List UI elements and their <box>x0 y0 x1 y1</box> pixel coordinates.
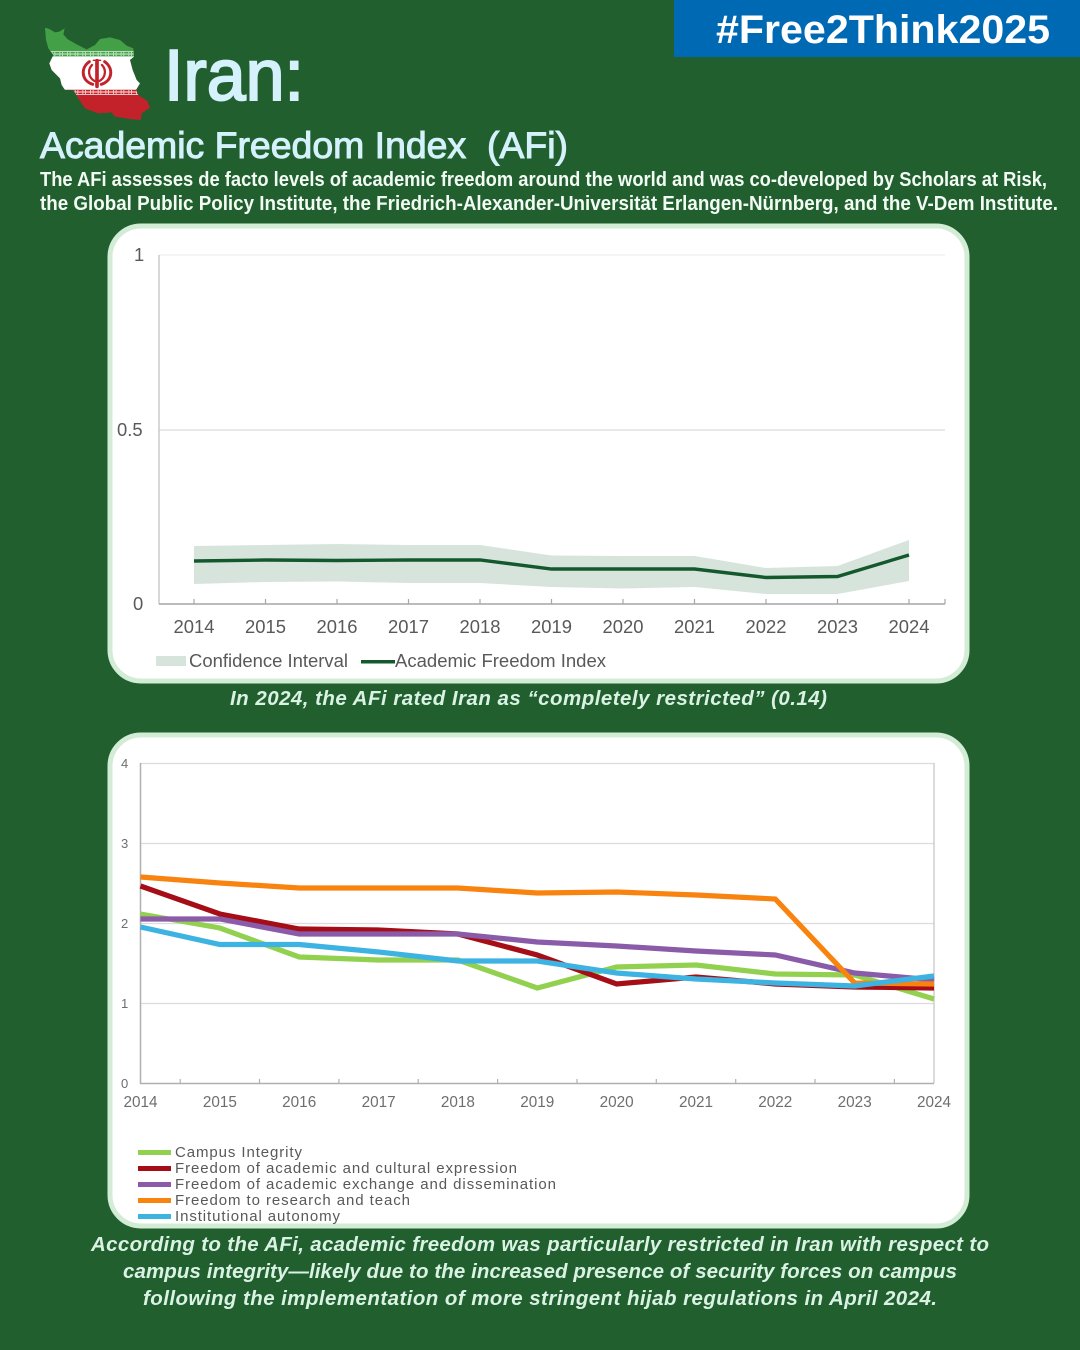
legend: Institutional autonomy <box>175 1208 340 1225</box>
caption: campus integrity: campus integrity—likely due to the increased presence of security forces on campus <box>123 1260 957 1283</box>
x axis labels: 2018 <box>441 1094 475 1111</box>
legend <box>138 1144 556 1225</box>
legend: Freedom of academic and cultural expression <box>175 1160 517 1177</box>
y axis labels: 0.5 <box>117 419 143 440</box>
x axis labels <box>174 616 929 637</box>
x axis labels: 2019 <box>531 616 572 637</box>
x axis labels: 2020 <box>600 1094 634 1111</box>
x axis labels: 2015 <box>245 616 286 637</box>
y axis labels: 3 <box>121 836 128 851</box>
x axis labels: 2023 <box>838 1094 872 1111</box>
caption: campus integrity <box>90 1233 989 1310</box>
y axis labels <box>117 244 144 614</box>
y axis labels <box>121 756 128 1091</box>
y axis labels: 0 <box>133 593 143 614</box>
line: academic and cultural expression <box>140 886 934 988</box>
intro text <box>40 169 1058 215</box>
x axis labels: 2014 <box>123 1094 158 1111</box>
y axis labels: 2 <box>121 916 128 931</box>
title: Iran: Iran: <box>164 36 304 116</box>
line: academic exchange and dissemination <box>140 919 934 980</box>
x axis labels: 2015 <box>203 1094 237 1111</box>
x axis labels: 2014 <box>174 616 214 637</box>
x axis labels: 2017 <box>388 616 429 637</box>
heading: Academic Freedom Index: Academic Freedom Index (AFi) <box>40 125 568 166</box>
x axis labels: 2023 <box>817 616 858 637</box>
y axis labels: 1 <box>134 244 144 265</box>
hashtag banner <box>674 0 1080 57</box>
legend: Freedom of academic exchange and dissemination <box>175 1176 556 1193</box>
x axis labels: 2022 <box>746 616 786 637</box>
panel: indicator chart <box>110 735 967 1226</box>
caption: 2024 rating: In 2024, the AFi rated Iran as “completely restricted” (0.14) <box>230 687 827 710</box>
legend: Academic Freedom Index <box>395 650 606 671</box>
legend: Freedom to research and teach <box>175 1192 410 1209</box>
y axis and gridlines <box>159 255 945 604</box>
x axis labels: 2020 <box>603 616 643 637</box>
x axis labels <box>123 1094 952 1111</box>
line: campus integrity <box>140 914 934 999</box>
x axis labels: 2019 <box>520 1094 554 1111</box>
hashtag banner: #Free2Think2025 <box>716 8 1050 52</box>
x axis labels: 2016 <box>282 1094 316 1111</box>
legend: Confidence Interval <box>189 650 348 671</box>
y axis labels: 0 <box>121 1076 128 1091</box>
legend: Campus Integrity <box>175 1144 302 1161</box>
x axis labels: 2024 <box>889 616 929 637</box>
axes and gridlines <box>140 763 934 1084</box>
y axis labels: 4 <box>121 756 128 771</box>
confidence interval band <box>194 540 909 594</box>
panel: Academic Freedom Index chart <box>110 226 967 681</box>
line: institutional autonomy <box>140 927 934 986</box>
x axis labels: 2016 <box>317 616 357 637</box>
line: research and teach <box>140 877 934 984</box>
x axis labels: 2021 <box>674 616 715 637</box>
caption: campus integrity: following the implementation of more stringent hijab regulations in April 2024. <box>143 1287 937 1310</box>
x axis labels: 2017 <box>362 1094 396 1111</box>
icon: Iran map with flag <box>45 28 150 120</box>
caption: campus integrity: According to the AFi, academic freedom was particularly restricted in Iran with respect to <box>90 1233 989 1256</box>
legend <box>156 650 606 671</box>
x axis labels: 2018 <box>460 616 500 637</box>
academic freedom index line <box>194 555 909 578</box>
x axis labels: 2024 <box>917 1094 952 1111</box>
x axis labels: 2021 <box>679 1094 713 1111</box>
y axis labels: 1 <box>121 996 128 1011</box>
x axis labels: 2022 <box>758 1094 792 1111</box>
